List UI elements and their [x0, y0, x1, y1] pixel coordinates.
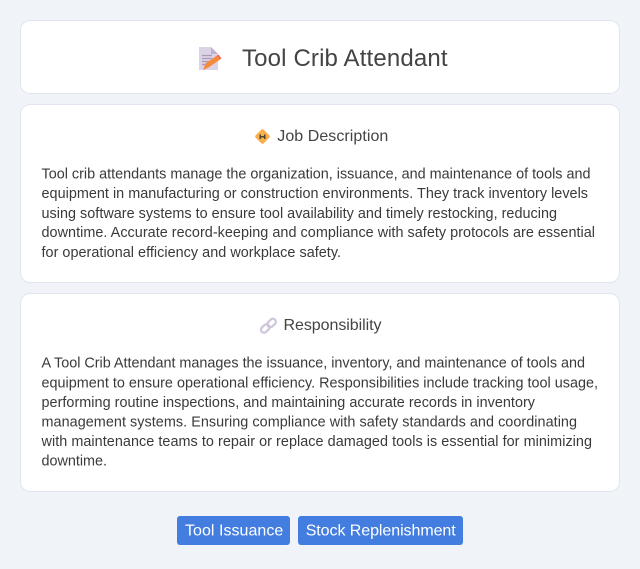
tag: stock replenishment: [298, 516, 463, 545]
text block: job description: using software systems to ensure tool availability and timely restocking, reducing: [42, 206, 557, 222]
text block: job description: [42, 166, 595, 261]
icon: construction diamond: [255, 129, 270, 144]
text block: job description: downtime. Accurate record-keeping and compliance with safety protocols are essential: [42, 225, 595, 241]
text block: job description: equipment in manufacturing or construction environments. They track inventory levels: [42, 186, 588, 202]
icon: link: [260, 318, 277, 334]
icon: document with pencil: [199, 47, 222, 70]
text block: responsibility: with maintenance teams to repair or replace damaged tools is essential for minimizing: [40, 434, 592, 450]
text block: responsibility: management systems. Ensuring compliance with safety standards and coordinating: [42, 414, 577, 430]
text block: job description: Tool crib attendants manage the organization, issuance, and maintenance of tools and: [42, 166, 590, 182]
title: Tool Crib Attendant: [242, 45, 448, 72]
tag: tool issuance: [177, 516, 290, 545]
text block: responsibility: downtime.: [42, 454, 107, 470]
panel: responsibility: [20, 293, 620, 492]
tag: tool issuance: Tool Issuance: [185, 522, 283, 540]
text block: responsibility: A Tool Crib Attendant manages the issuance, inventory, and maintenance of tools and: [42, 356, 585, 372]
panel: title card: [20, 20, 620, 94]
panel: job description: [20, 104, 620, 283]
text block: responsibility: performing routine inspections, and maintaining accurate records in inventory: [42, 395, 536, 411]
text block: responsibility: equipment to ensure operational efficiency. Responsibilities include tracking tool usage,: [42, 376, 598, 392]
tag: stock replenishment: Stock Replenishment: [306, 522, 456, 540]
heading: job description: Job Description: [277, 128, 388, 145]
text block: responsibility: [40, 356, 598, 470]
heading: responsibility: Responsibility: [284, 317, 382, 334]
text block: job description: for operational efficiency and workplace safety.: [42, 245, 341, 261]
